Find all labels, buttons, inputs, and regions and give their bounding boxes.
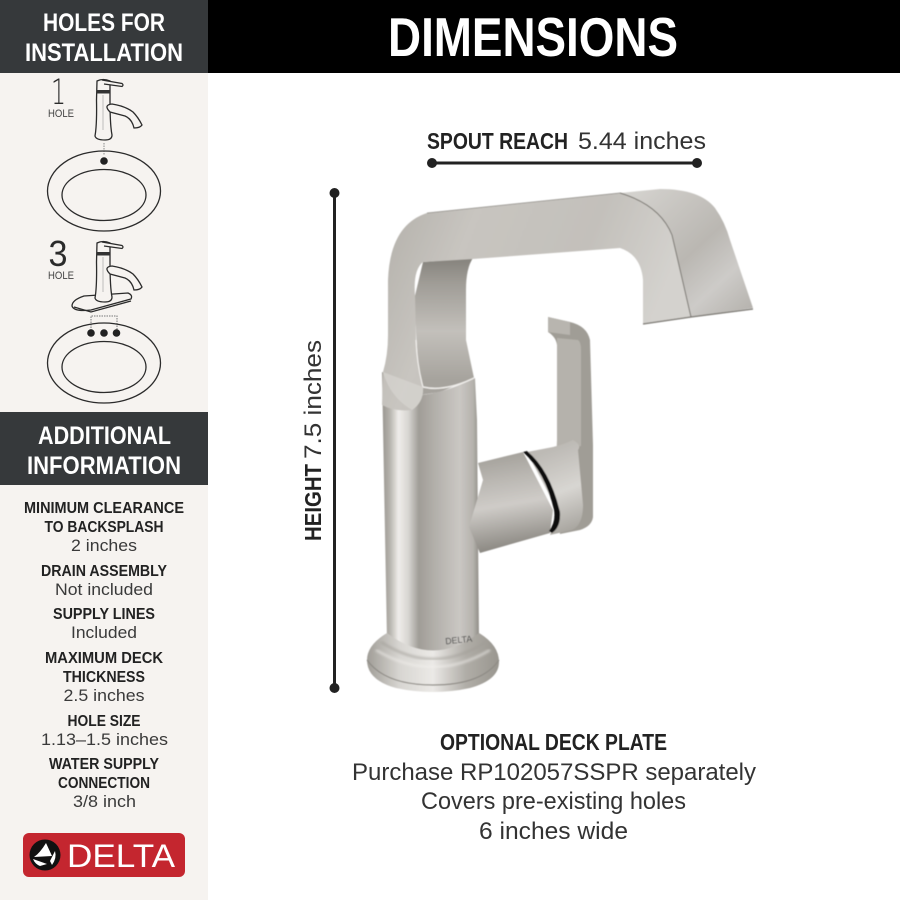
faucet handle cap xyxy=(527,440,583,535)
header: holes for installation xyxy=(0,0,208,73)
text block: additional information specs: 2 inches xyxy=(71,537,137,555)
faucet logo: DELTA xyxy=(445,634,473,646)
text block: additional information specs: MAXIMUM DECK xyxy=(45,650,164,667)
label: height: 7.5 inches xyxy=(300,340,327,459)
faucet body xyxy=(382,372,479,652)
label: spout reach: 5.44 inches xyxy=(578,128,706,155)
header: additional information: ADDITIONAL xyxy=(38,422,171,450)
text block: optional deck plate: Covers pre-existing holes xyxy=(421,788,686,815)
text block: optional deck plate: 6 inches wide xyxy=(479,818,628,845)
label: height: HEIGHT xyxy=(300,464,326,541)
text block: additional information specs: CONNECTION xyxy=(58,775,150,792)
header: additional information xyxy=(0,412,208,485)
icon: three hole installation xyxy=(48,233,160,403)
faucet black ring xyxy=(523,451,560,533)
label: spout reach: SPOUT REACH xyxy=(427,128,568,154)
text block: optional deck plate: Purchase RP102057SSPR separately xyxy=(352,759,756,786)
icon: one hole installation xyxy=(48,73,160,231)
icon: three hole installation: 3 xyxy=(48,233,68,274)
text block: additional information specs: TO BACKSPLASH xyxy=(44,519,164,536)
arrow: spout reach dimension line xyxy=(427,158,702,168)
text block: additional information specs: HOLE SIZE xyxy=(68,713,140,730)
text block: additional information specs: Not included xyxy=(55,581,153,599)
text block: additional information specs: 3/8 inch xyxy=(73,793,136,811)
text block: additional information specs: MINIMUM CLEARANCE xyxy=(24,500,184,517)
faucet inner neck xyxy=(414,258,474,395)
label: height xyxy=(300,340,327,541)
header: holes for installation: INSTALLATION xyxy=(25,39,183,67)
header: holes for installation: HOLES FOR xyxy=(43,9,165,37)
logo: delta xyxy=(23,833,185,877)
faucet lever xyxy=(548,317,593,534)
faucet spout top xyxy=(382,193,691,410)
illustration: faucet xyxy=(367,189,753,692)
title: dimensions: DIMENSIONS xyxy=(388,6,678,68)
text block: additional information specs: THICKNESS xyxy=(63,669,145,686)
text block: additional information specs: Included xyxy=(71,624,137,642)
text block: additional information specs: WATER SUPPLY xyxy=(49,756,160,773)
icon: one hole installation: HOLE xyxy=(48,108,74,120)
icon: three hole installation: HOLE xyxy=(48,270,74,282)
logo: delta: DELTA xyxy=(67,838,176,874)
text block: additional information specs: 2.5 inches xyxy=(64,687,144,705)
text block: additional information specs: 1.13–1.5 inches xyxy=(41,731,168,749)
text block: additional information specs: SUPPLY LINES xyxy=(53,606,155,623)
label: spout reach xyxy=(427,128,706,155)
text block: optional deck plate: OPTIONAL DECK PLATE xyxy=(440,729,667,755)
text block: optional deck plate xyxy=(352,729,756,845)
faucet base xyxy=(367,633,499,692)
header: additional information: INFORMATION xyxy=(27,452,181,480)
panel: left sidebar background xyxy=(0,0,208,900)
text block: additional information specs xyxy=(24,500,184,811)
icon: one hole installation: 1 xyxy=(51,73,66,113)
title: dimensions xyxy=(208,0,900,73)
text block: additional information specs: DRAIN ASSEMBLY xyxy=(41,563,168,580)
faucet handle xyxy=(469,452,553,553)
faucet spout end xyxy=(620,189,753,317)
arrow: height dimension line xyxy=(330,188,340,693)
